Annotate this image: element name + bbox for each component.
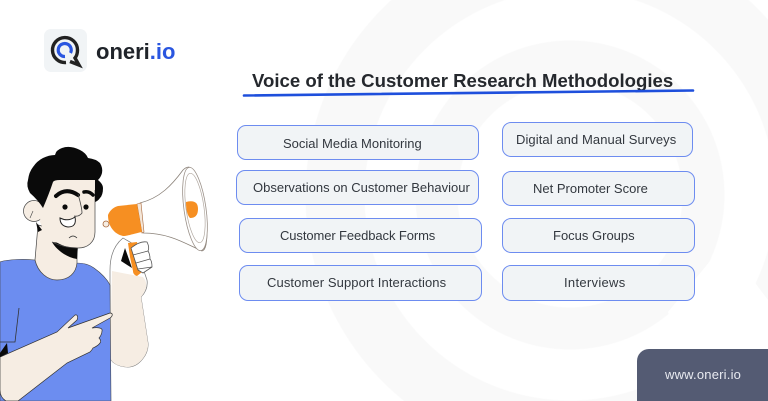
card: Customer Support Interactions xyxy=(239,265,482,301)
card: Observations on Customer Behaviour xyxy=(236,170,479,205)
title underline xyxy=(242,89,694,97)
website badge: www.oneri.io xyxy=(665,367,741,382)
card: Focus Groups xyxy=(502,218,695,253)
card: Digital and Manual Surveys xyxy=(502,122,693,157)
icon: megaphone xyxy=(103,166,212,276)
title: Voice of the Customer Research Methodologies xyxy=(252,70,673,91)
head and face xyxy=(24,147,103,248)
card: Social Media Monitoring xyxy=(237,125,479,160)
logo xyxy=(44,29,175,72)
card: Net Promoter Score: Net Promoter Score xyxy=(533,180,648,196)
icon: oneri logo mark xyxy=(44,29,87,72)
front arm pointing xyxy=(0,313,112,401)
card: Net Promoter Score xyxy=(502,171,695,206)
card: Social Media Monitoring: Social Media Monitoring xyxy=(283,136,422,150)
background watermark: tail notch xyxy=(640,240,768,350)
back arm xyxy=(110,238,148,367)
card: Customer Feedback Forms xyxy=(239,218,482,253)
body: blue t-shirt xyxy=(0,259,111,401)
card: Digital and Manual Surveys: Digital and Manual Surveys xyxy=(516,132,676,146)
card: Observations on Customer Behaviour: Observations on Customer Behaviour xyxy=(253,180,470,194)
card: Customer Support Interactions: Customer Support Interactions xyxy=(267,275,446,290)
background watermark: rings xyxy=(300,0,768,401)
illustration: man with megaphone xyxy=(0,146,208,401)
website badge xyxy=(637,349,768,401)
logo wordmark: oneri.io xyxy=(96,39,175,64)
card: Focus Groups: Focus Groups xyxy=(553,228,635,242)
card: Interviews xyxy=(502,265,695,301)
card: Customer Feedback Forms: Customer Feedback Forms xyxy=(280,228,435,242)
neck xyxy=(35,222,78,280)
card: Interviews: Interviews xyxy=(564,275,626,290)
